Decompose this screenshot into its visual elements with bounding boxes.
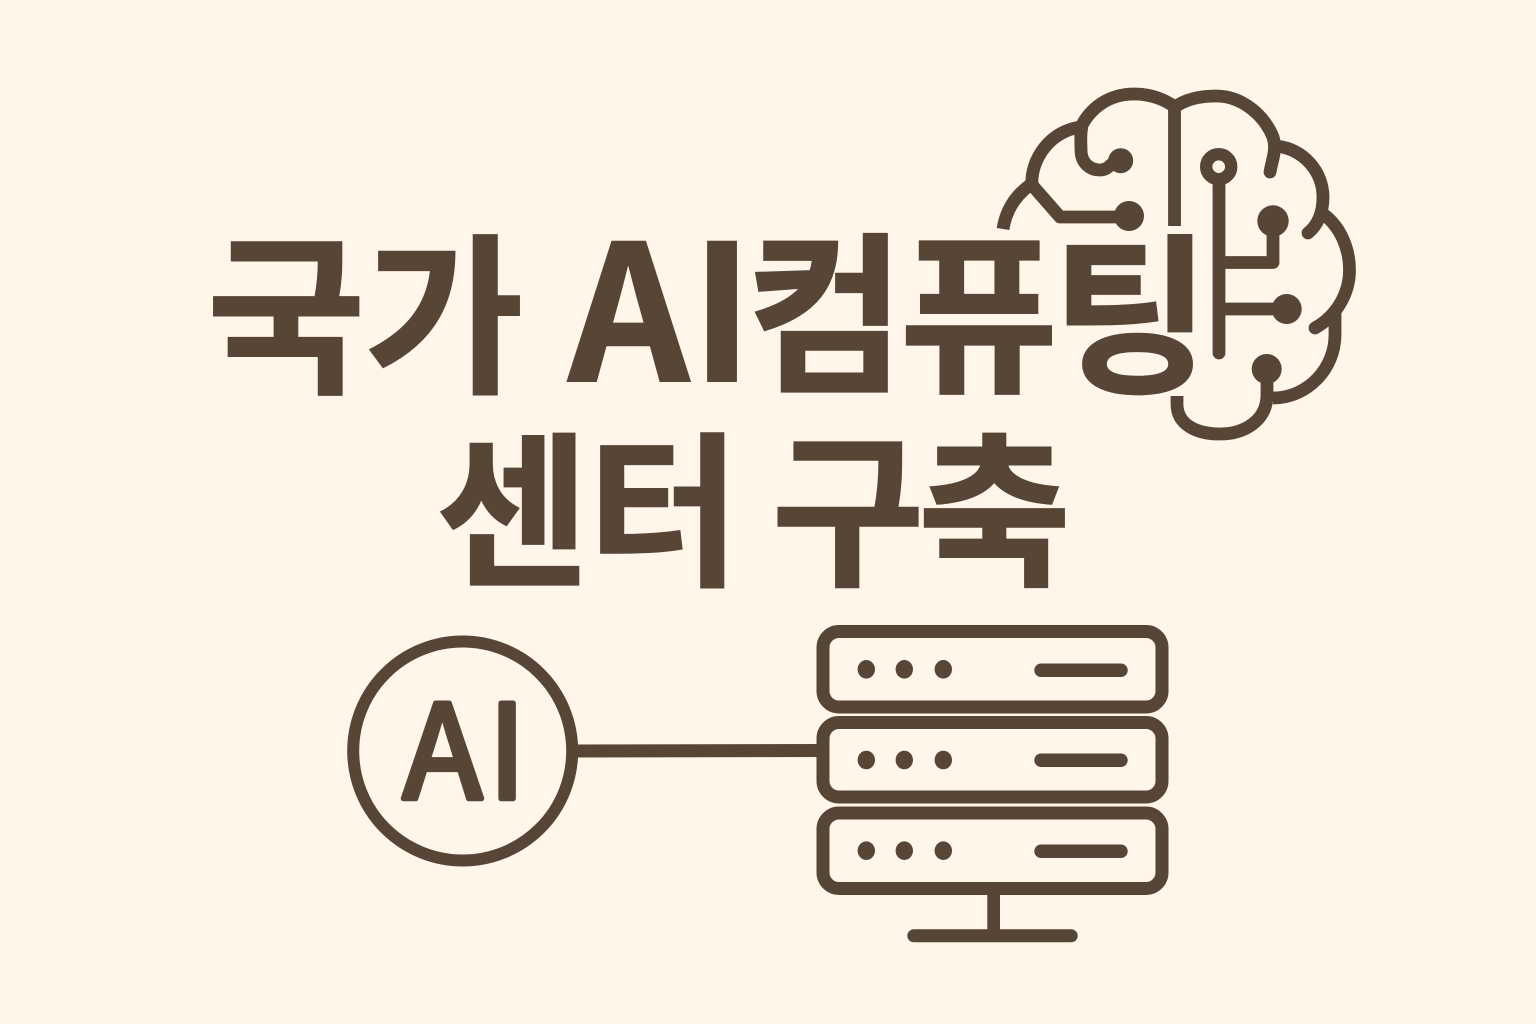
server unit 2 — [823, 722, 1162, 797]
icon: server rack — [823, 632, 1162, 942]
title — [207, 164, 1210, 620]
title line 2: 구 — [772, 380, 924, 620]
title line 1: 국 — [207, 180, 365, 430]
title line 1: 가 — [365, 180, 523, 430]
AI label: A — [403, 648, 482, 836]
title line 1: A — [568, 164, 690, 436]
icon: AI circle badge — [353, 642, 572, 860]
icon: brain with circuit lines — [1003, 94, 1350, 434]
server unit 1 — [823, 632, 1162, 707]
title line 1: 팅 — [1052, 179, 1210, 429]
title line 2: 축 — [918, 380, 1071, 620]
title line 2: 센 — [437, 380, 589, 620]
server stand — [907, 893, 1078, 942]
title line 2: 터 — [588, 380, 740, 620]
title line 1: I — [691, 164, 753, 436]
AI label: I — [488, 648, 526, 836]
server unit 3 — [823, 813, 1162, 888]
title line 1: 퓨 — [900, 178, 1058, 428]
connector line — [572, 744, 823, 758]
title line 1: 컴 — [746, 178, 905, 428]
